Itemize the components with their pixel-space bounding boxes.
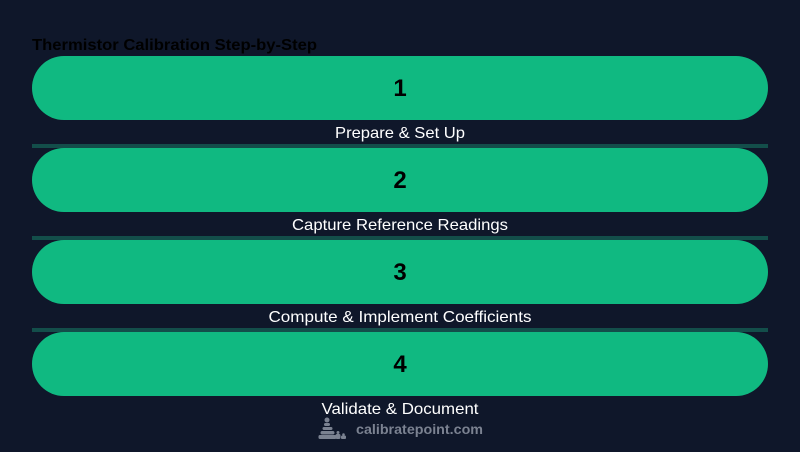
step 1 pill — [32, 56, 768, 120]
step 4 number: 4 — [393, 351, 407, 378]
step 2 — [32, 148, 768, 234]
step 1 — [32, 56, 768, 142]
icon: stacked calibration weights — [318, 418, 346, 439]
brand name: calibratepoint.com — [356, 421, 483, 437]
step 3 number: 3 — [393, 259, 407, 286]
step 4 — [32, 332, 768, 418]
title: Thermistor Calibration Step-by-Step — [32, 37, 317, 54]
step 2 pill — [32, 148, 768, 212]
step 4 pill — [32, 332, 768, 396]
step 1 number: 1 — [393, 75, 407, 102]
step 1 label: Prepare & Set Up — [335, 125, 465, 142]
step 2 number: 2 — [393, 167, 407, 194]
step 3 — [32, 240, 768, 326]
step 2 label: Capture Reference Readings — [292, 217, 508, 234]
step 3 pill — [32, 240, 768, 304]
step 4 label: Validate & Document — [322, 401, 479, 418]
step 3 label: Compute & Implement Coefficients — [268, 309, 532, 326]
